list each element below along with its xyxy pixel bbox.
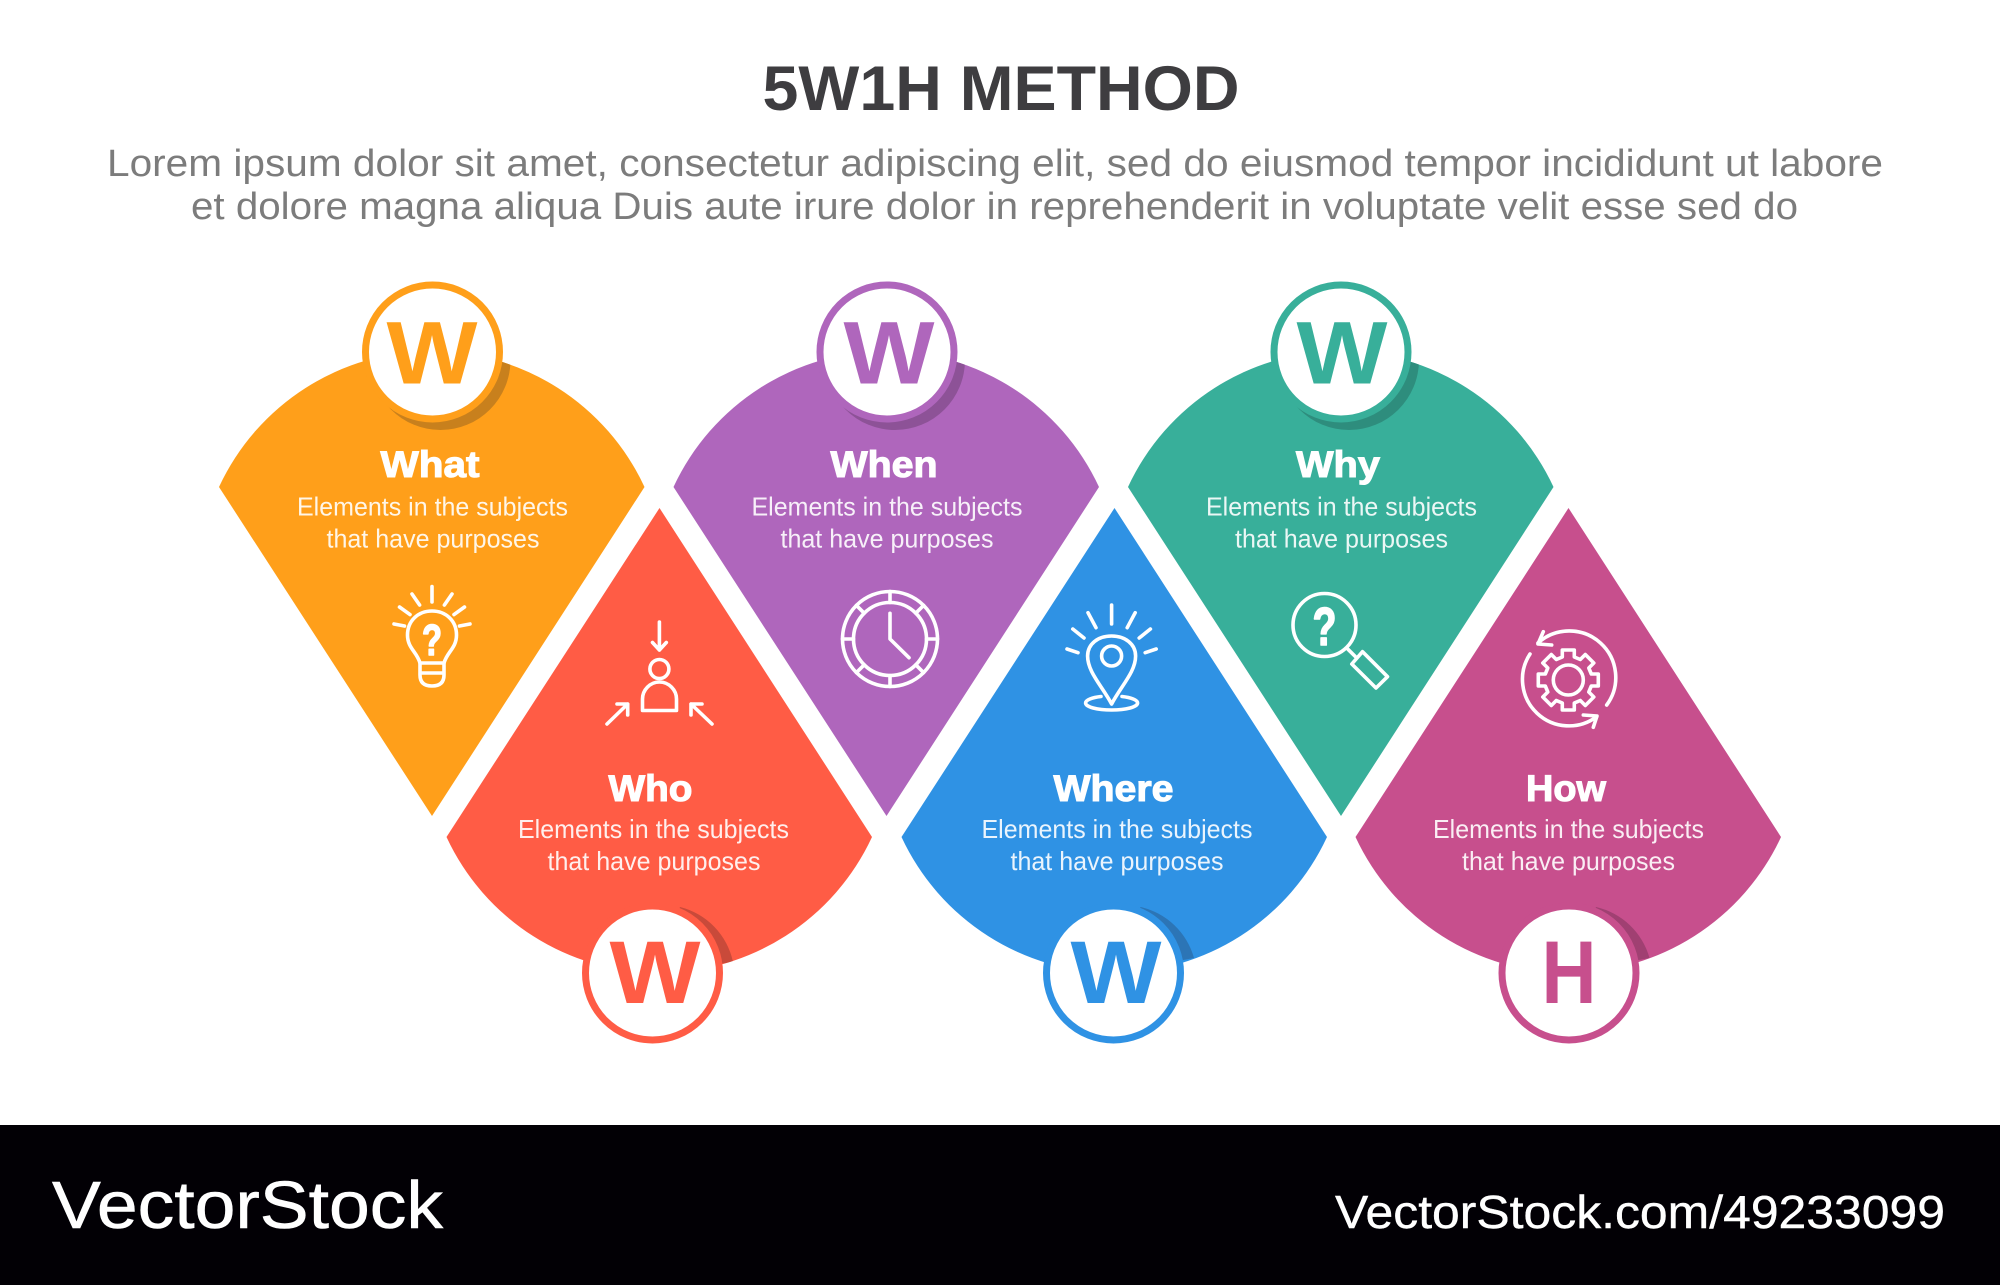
- icon: magnifier with question mark: ?: [1312, 597, 1336, 657]
- subtitle text block: [107, 143, 1883, 228]
- Where badge shadow: [1140, 907, 1194, 960]
- panel: Who: [446, 508, 872, 1040]
- What description: [297, 492, 568, 554]
- How badge: [1502, 906, 1636, 1040]
- Where description: that have purposes: [1010, 846, 1224, 876]
- Where description: [982, 814, 1252, 876]
- Who badge shadow: [680, 907, 733, 964]
- footer logo: VectorStock: [52, 1168, 444, 1243]
- icon: magnifier with question mark: [1293, 594, 1388, 688]
- Who description: Elements in the subjects: [518, 814, 789, 844]
- Why description: Elements in the subjects: [1206, 492, 1477, 522]
- Why heading: Why: [1296, 444, 1380, 485]
- Who description: [518, 814, 789, 876]
- Why badge: [1274, 285, 1408, 419]
- What description: Elements in the subjects: [297, 492, 568, 522]
- When badge: W: [844, 302, 934, 402]
- icon: light bulb with question mark: ?: [422, 616, 442, 665]
- Why description: [1206, 492, 1477, 554]
- Who shape: [446, 508, 872, 973]
- footer bar: [0, 1125, 2000, 1285]
- Who heading: Who: [608, 768, 692, 809]
- panel: When: [674, 285, 1099, 816]
- Why shape: [1128, 351, 1554, 816]
- When heading: When: [830, 444, 938, 485]
- icon: light bulb with question mark: [394, 586, 470, 686]
- subtitle text block: Lorem ipsum dolor sit amet, consectetur adipiscing elit, sed do eiusmod tempor incididunt ut labore: [107, 143, 1883, 185]
- Who badge: W: [610, 922, 700, 1022]
- icon: location pin: [1067, 605, 1156, 710]
- Why description: that have purposes: [1235, 524, 1448, 554]
- Where heading: Where: [1054, 768, 1174, 809]
- Who badge: [586, 906, 720, 1040]
- When badge: [820, 285, 954, 419]
- footer image id: VectorStock.com/49233099: [1335, 1186, 1945, 1238]
- icon: gear with rotating arrows: [1522, 631, 1616, 727]
- Why badge: W: [1296, 302, 1388, 402]
- What shape: [219, 351, 644, 816]
- What heading: What: [380, 444, 480, 485]
- icon: person with arrows: [607, 622, 712, 724]
- How heading: How: [1526, 768, 1606, 809]
- Where description: Elements in the subjects: [982, 814, 1252, 844]
- When description: Elements in the subjects: [752, 492, 1022, 522]
- What badge: [366, 285, 500, 419]
- What description: that have purposes: [326, 524, 540, 554]
- Why badge shadow: [1298, 362, 1419, 430]
- How description: [1433, 814, 1704, 876]
- What badge: W: [386, 302, 478, 402]
- title: 5W1H METHOD: [762, 54, 1240, 124]
- How shape: [1356, 508, 1781, 973]
- panel: How: [1356, 508, 1781, 1040]
- How description: Elements in the subjects: [1433, 814, 1704, 844]
- panel: Why: [1128, 285, 1554, 816]
- What badge shadow: [389, 362, 510, 430]
- icon: clock: [842, 592, 938, 686]
- How badge shadow: [1596, 907, 1650, 960]
- Where shape: [902, 508, 1327, 973]
- When description: [752, 492, 1022, 554]
- Where badge: [1046, 906, 1180, 1040]
- Where badge: W: [1070, 922, 1162, 1022]
- When description: that have purposes: [780, 524, 994, 554]
- When shape: [674, 351, 1099, 816]
- How badge: H: [1542, 922, 1596, 1022]
- panel: Where: [902, 508, 1327, 1040]
- How description: that have purposes: [1462, 846, 1675, 876]
- subtitle text block: et dolore magna aliqua Duis aute irure dolor in reprehenderit in voluptate velit esse sed do: [191, 186, 1798, 228]
- panel: What: [219, 285, 644, 816]
- When badge shadow: [844, 362, 965, 430]
- Who description: that have purposes: [548, 846, 760, 876]
